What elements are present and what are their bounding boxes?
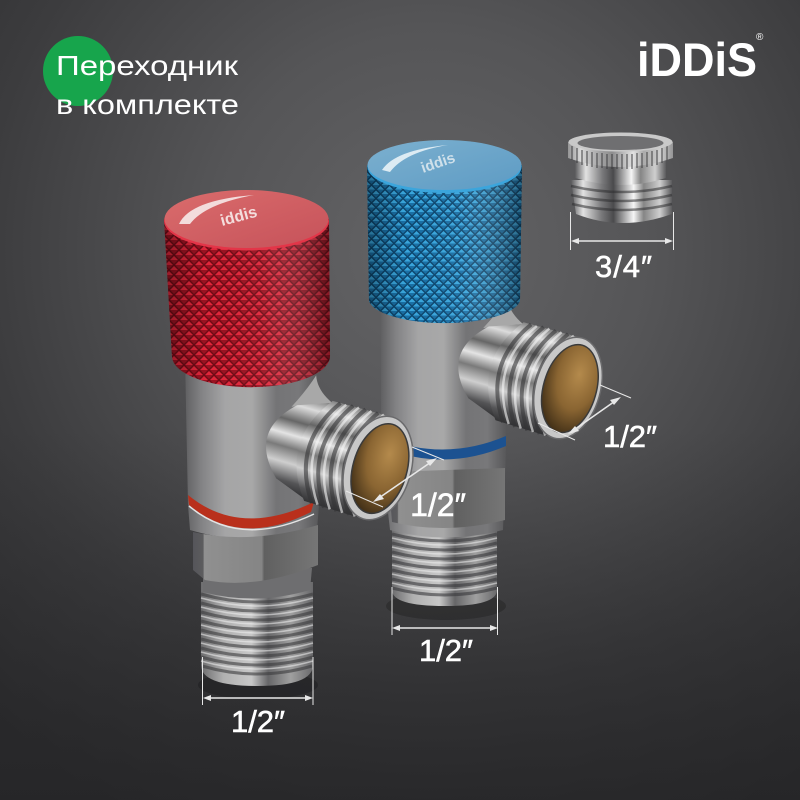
dimension: blue valve bottom 1/2 inch xyxy=(392,587,498,668)
blue knurled knob xyxy=(367,140,522,323)
blue knurled knob: iddis xyxy=(419,149,457,177)
badge: green circle xyxy=(43,36,113,106)
adapter fitting xyxy=(568,132,673,223)
valve: red handle xyxy=(164,190,430,699)
dimension: adapter 3/4 inch: 3/4″ xyxy=(595,249,653,284)
logo: IDDIS: iDDiS xyxy=(637,33,757,86)
red valve outlet xyxy=(253,367,430,528)
dimension: blue valve outlet 1/2 inch: 1/2″ xyxy=(603,419,657,454)
heading: adapter included: Переходник xyxy=(56,50,239,81)
red knurled knob: iddis xyxy=(219,204,259,230)
adapter neck xyxy=(575,155,666,185)
blue ring xyxy=(383,436,506,460)
blue valve hex nut xyxy=(388,468,505,528)
dimension: red valve bottom 1/2 inch: 1/2″ xyxy=(231,704,285,739)
blue valve body xyxy=(381,300,506,538)
dimension: red valve outlet 1/2 inch: 1/2″ xyxy=(410,487,466,523)
heading: adapter included: в комплекте xyxy=(56,89,239,120)
red valve lower collar xyxy=(203,568,312,599)
logo: IDDIS: ® xyxy=(756,32,764,43)
valve: blue handle xyxy=(367,140,619,620)
dimension: red valve bottom 1/2 inch xyxy=(202,657,313,739)
red valve thread xyxy=(201,582,313,686)
adapter thread xyxy=(571,180,672,223)
red valve hex nut xyxy=(193,525,318,583)
blue valve outlet xyxy=(445,289,619,447)
red knurled knob xyxy=(164,190,330,387)
dimension: adapter 3/4 inch xyxy=(570,212,674,284)
red valve body xyxy=(185,355,319,539)
dimension: blue valve outlet 1/2 inch xyxy=(538,385,657,454)
adapter knurled ring xyxy=(568,142,673,167)
dimension: blue valve bottom 1/2 inch: 1/2″ xyxy=(419,633,473,668)
dimension: red valve outlet 1/2 inch xyxy=(346,447,466,523)
red ring xyxy=(188,495,314,530)
blue valve thread xyxy=(392,525,497,606)
